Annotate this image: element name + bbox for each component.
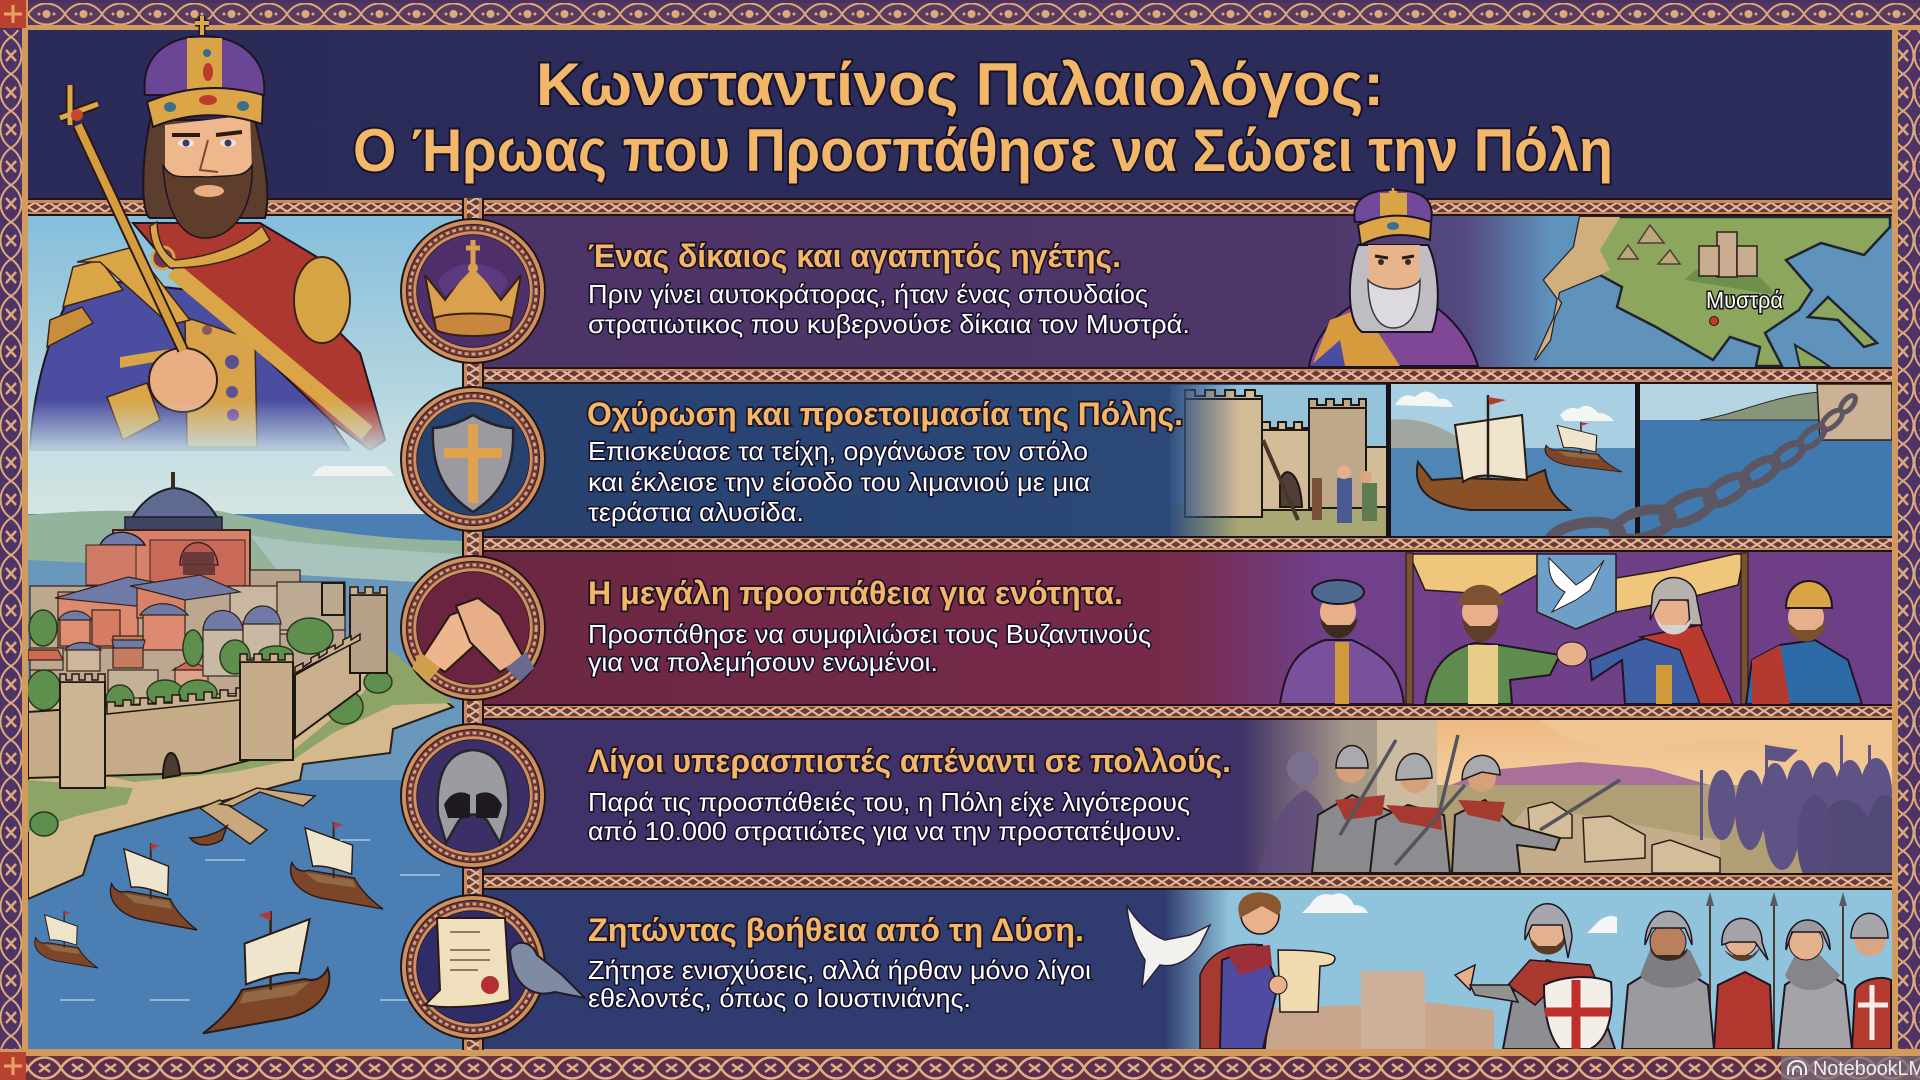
row 3 text: [588, 619, 1151, 677]
row 1 text: [588, 279, 1190, 339]
panel: row 2 fortification: [470, 384, 1892, 558]
row 4 text: [588, 787, 1190, 846]
panel: title banner: [28, 30, 1892, 198]
panel: row 5 help from the West: [470, 890, 1892, 1050]
row 4 text: Παρά τις προσπάθειές του, η Πόλη είχε λιγότερους: [588, 787, 1190, 817]
row 2 heading: Οχύρωση και προετοιμασία της Πόλης.: [587, 396, 1183, 432]
coin emblem: [294, 257, 350, 343]
medallion: shield: [400, 386, 546, 532]
cuff: [107, 383, 160, 440]
medallion: helmet: [400, 723, 546, 869]
old ruler portrait: [1309, 188, 1478, 366]
icon: wax seal: [481, 976, 499, 994]
piers: [200, 800, 267, 844]
row 2 text: Επισκεύασε τα τείχη, οργάνωσε τον στόλο: [588, 436, 1088, 466]
head: [143, 115, 267, 238]
map label: Mystras: Μυστρά: [1706, 287, 1783, 313]
city buildings: [28, 570, 345, 700]
jewelled robe panel: [185, 317, 257, 447]
imperial crown: [145, 16, 264, 127]
hills: [28, 509, 468, 600]
title: Κωνσταντίνος Παλαιολόγος:: [536, 51, 1384, 118]
western knights group: [1455, 892, 1891, 1049]
gold sash: [173, 270, 367, 433]
collar: [150, 222, 270, 268]
emperor portrait: [30, 16, 385, 450]
panel: row 1 just ruler: [470, 216, 1892, 367]
row 3 text: Προσπάθησε να συμφιλιώσει τους Βυζαντινούς: [588, 619, 1151, 649]
shore: [28, 655, 453, 899]
distant army silhouettes: [1700, 735, 1905, 900]
icon: scroll: [425, 918, 510, 1007]
reconciliation scene: [1280, 553, 1862, 704]
sky and western knights: [1165, 890, 1892, 1050]
chain links: [1547, 393, 1858, 558]
harbour chain scene: [1637, 384, 1892, 536]
Hagia Sophia: [86, 472, 250, 590]
messenger with scroll: [1200, 892, 1335, 1049]
icon: pigeon: [510, 943, 585, 998]
icon: shield with cross: [433, 415, 513, 512]
row 2 text: τεράστια αλυσίδα.: [588, 497, 804, 527]
row 5 text: [588, 955, 1091, 1013]
row 1 text: Πριν γίνει αυτοκράτορας, ήταν ένας σπουδαίος: [588, 279, 1148, 309]
defending soldiers: [1258, 735, 1620, 873]
fleet scene: [1388, 384, 1637, 536]
merlons: [60, 587, 387, 714]
title: [353, 51, 1613, 184]
panel: row 4 defenders: [470, 720, 1905, 900]
red cape: [133, 223, 385, 450]
medallion: scroll and pigeon: [400, 894, 585, 1040]
hand: [149, 348, 217, 412]
icon: crown: [425, 240, 521, 336]
city walls and towers: [28, 583, 387, 788]
row 3 heading: Η μεγάλη προσπάθεια για ενότητα.: [588, 575, 1123, 611]
icon: clasped hands: [412, 598, 534, 682]
panel: row 3 unity: [470, 552, 1892, 704]
row 5 text: εθελοντές, όπως ο Ιουστινιάνης.: [588, 983, 971, 1013]
panel: left illustration of Constantinople: [27, 214, 468, 1050]
waves: [60, 790, 450, 1000]
row 2 text: και έκλεισε την είσοδο του λιμανιού με μια: [588, 467, 1090, 497]
row 5 text: Ζήτησε ενισχύσεις, αλλά ήρθαν μόνο λίγοι: [588, 955, 1091, 985]
ships in harbour: [35, 822, 383, 1033]
row 5 heading: Ζητώντας βοήθεια από τη Δύση.: [588, 912, 1084, 948]
medallion: handshake: [400, 555, 546, 701]
row 3 text: για να πολεμήσουν ενωμένοι.: [588, 647, 938, 677]
row 1 text: στρατιωτικος που κυβερνούσε δίκαια τον Μυστρά.: [588, 309, 1190, 339]
icon: helmet: [438, 750, 508, 843]
map of Mystras: [1535, 217, 1890, 367]
row 2 text: [588, 436, 1090, 527]
sceptre: [60, 85, 183, 350]
title: Ο Ήρωας που Προσπάθησε να Σώσει την Πόλη: [353, 117, 1613, 184]
white dove: [1127, 905, 1210, 988]
medallion: crown: [400, 218, 546, 364]
ornamental dividers: [28, 198, 1892, 1050]
trees: [27, 610, 392, 836]
walls scene: [1170, 385, 1390, 536]
row 1 heading: Ένας δίκαιος και αγαπητός ηγέτης.: [588, 238, 1121, 274]
blue tunic: [30, 280, 350, 450]
row 4 heading: Λίγοι υπερασπιστές απέναντι σε πολλούς.: [588, 743, 1231, 779]
battlements scene: [1240, 720, 1892, 873]
gold shoulder: [47, 247, 190, 347]
arm band: [120, 348, 177, 368]
row 4 text: από 10.000 στρατιώτες για να την προστατέψουν.: [588, 816, 1182, 846]
